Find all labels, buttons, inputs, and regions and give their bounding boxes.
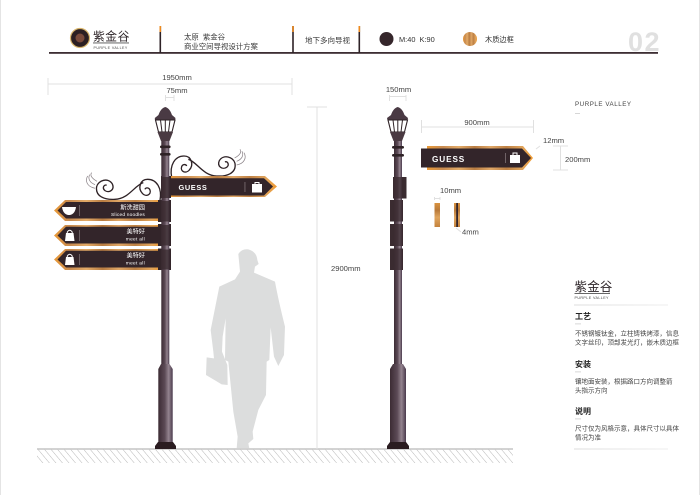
logo: header: 紫金谷: [93, 30, 130, 44]
sign: meet all 2: 美特好: [126, 252, 145, 260]
pole foot: [155, 442, 176, 449]
sign: meet all 2: meet all: [126, 260, 145, 266]
logo: panel: PURPLE VALLEY: [574, 296, 609, 300]
pole clamps: [161, 177, 169, 270]
sign width dimension: 900mm: [464, 118, 490, 127]
sign: noodles: 斯洗甜园: [120, 204, 145, 212]
section title: 地下多向导视: [305, 35, 350, 45]
side width dimension: [386, 85, 411, 101]
brand label: [575, 101, 632, 114]
side section: dark core: [454, 203, 479, 236]
pole clamps: [394, 177, 402, 270]
sign: meet all 2: [54, 248, 171, 270]
thickness dimension: 12mm: [543, 136, 564, 145]
logo: header: PURPLE VALLEY: [94, 46, 128, 50]
sign: noodles: [54, 200, 171, 222]
width dimensions: front view: 75mm: [166, 86, 188, 95]
thickness dimension: [536, 136, 564, 149]
lamp: [387, 107, 408, 157]
person silhouette: [206, 249, 285, 448]
sign detail: GUESS: [432, 155, 465, 164]
brand label: PURPLE VALLEY: [575, 101, 632, 108]
icon: bag: [65, 254, 74, 265]
sign: GUESS right: [161, 176, 277, 198]
icon: suitcase: [252, 182, 262, 192]
logo: panel: 紫金谷: [574, 279, 613, 294]
material swatch: wood: 木质边框: [485, 35, 514, 44]
front signpost: [54, 107, 277, 449]
header bar: [49, 26, 661, 57]
sign: GUESS right: GUESS: [178, 183, 207, 192]
pole base: [390, 364, 406, 443]
text: craft: 文字丝印，顶部发光灯，嵌木质边框: [575, 338, 680, 346]
height dimension: [307, 107, 361, 449]
icon: bag: [65, 230, 74, 241]
lamp: [155, 107, 176, 156]
heading: notes: 说明: [575, 406, 591, 416]
decorative scroll: left: [86, 173, 161, 201]
project title: 商业空间导视设计方案: [184, 42, 259, 51]
icon: bowl: [62, 207, 76, 215]
material swatch: wood: [463, 32, 514, 46]
sign: meet all 1: 美特好: [126, 228, 145, 236]
sign width dimension: [422, 118, 534, 133]
text: notes: 尺寸仅为风格示意，具体尺寸以具体: [575, 426, 679, 432]
side-view signpost: [387, 107, 409, 449]
height dimension: sign: 200mm: [565, 155, 590, 164]
sign: noodles: Sliced noodles: [111, 212, 145, 218]
text: craft: 不锈钢镀钛金，立柱铸铁烤漆，信息: [575, 330, 679, 338]
pole foot: [387, 442, 409, 449]
specification panel: [574, 279, 680, 450]
height dimension: sign: [553, 146, 590, 170]
side section: dark core: 4mm: [462, 228, 479, 236]
ground: [37, 448, 513, 463]
side section: wood edge: 10mm: [440, 186, 461, 195]
icon: suitcase: [510, 152, 520, 163]
text: install: 头指示方向: [575, 386, 608, 394]
colour swatch: dark: M:40 K:90: [399, 35, 435, 44]
sign: meet all 1: [54, 224, 171, 246]
logo: panel: [574, 279, 613, 300]
side brackets: [390, 177, 406, 270]
width dimensions: front view: 1950mm: [162, 73, 192, 82]
text: install: 镶地面安装，根据路口方向调整箭: [575, 378, 672, 386]
heading: craft: 工艺: [575, 311, 591, 321]
sign detail: [421, 146, 533, 170]
heading: install: 安装: [575, 359, 591, 369]
width dimensions: front view: [48, 73, 292, 101]
decorative scroll: right: [171, 149, 245, 177]
height dimension: 2900mm: [331, 264, 361, 273]
text: notes: 情况为准: [575, 432, 602, 442]
colour swatch: dark: [380, 32, 435, 46]
page number: 02: [628, 27, 661, 57]
pole base: [158, 364, 173, 443]
logo: header: [70, 28, 130, 50]
project title: 太原 紫金谷: [184, 32, 225, 42]
side width dimension: 150mm: [386, 85, 411, 94]
pole shaft: [161, 136, 169, 446]
side section: wood edge: [434, 186, 461, 227]
pole shaft: [394, 136, 402, 446]
sign: meet all 1: meet all: [126, 236, 145, 242]
